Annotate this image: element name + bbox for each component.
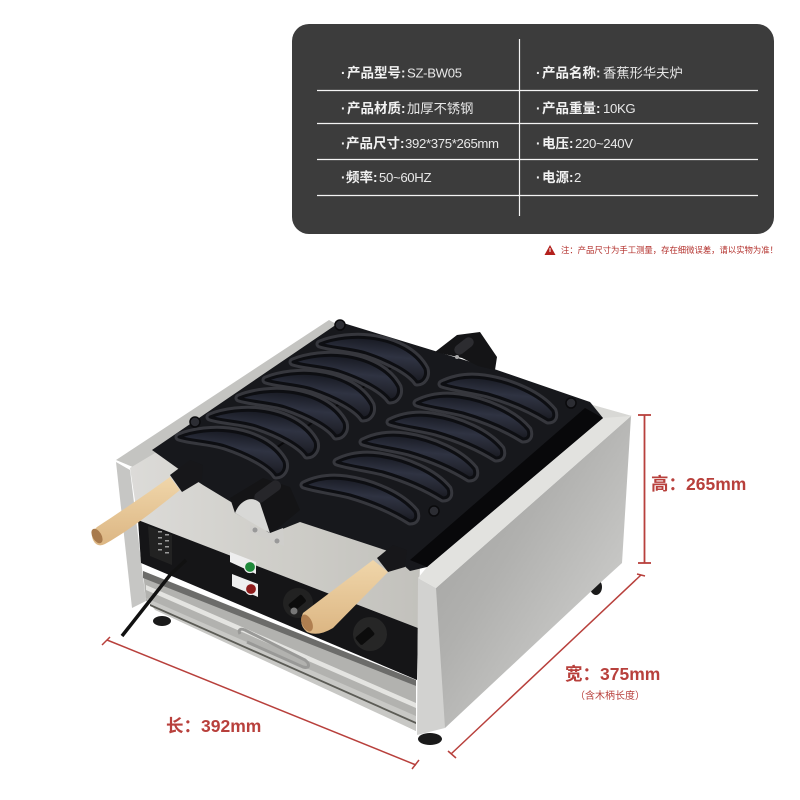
left steel post (116, 462, 146, 608)
spec: frequency: 50~60HZ (379, 170, 431, 185)
left plate mould rims (179, 337, 426, 475)
black waffle plate (152, 320, 603, 571)
left plate moulds (179, 337, 426, 475)
dimension: width: （含木柄长度） (575, 689, 645, 702)
machine feet (153, 579, 602, 745)
icon: warning triangle (544, 245, 556, 255)
spec: weight: · (536, 101, 540, 116)
illustration: banana waffle machine (89, 320, 632, 745)
control panel (138, 520, 418, 680)
spec: size: · (341, 136, 346, 151)
rear steel top edge (116, 320, 340, 470)
right steel side (417, 416, 631, 735)
spec: power: 电源: (542, 170, 574, 185)
spec: size: 产品尺寸: (346, 135, 404, 151)
power indicator (230, 552, 256, 574)
spec: model: · (341, 66, 346, 80)
spec: power: · (536, 170, 540, 185)
spec: voltage: 电压: (542, 136, 574, 151)
drawer (143, 571, 416, 731)
spec: material: · (341, 101, 346, 116)
power cord (122, 560, 186, 636)
drawer handle (239, 629, 309, 667)
rear hinge (435, 332, 497, 370)
spec: weight: 10KG (603, 101, 635, 116)
right plate moulds (304, 377, 554, 521)
spec: name: 香蕉形华夫炉 (603, 66, 683, 80)
note: measurement disclaimer: 注：产品尺寸为手工测量，存在细微误差，请以实物为准！ (561, 245, 778, 255)
dimension: width: 宽：375mm (565, 664, 660, 684)
spec: frequency: 频率: (346, 169, 378, 185)
spec: name: 产品名称: (542, 64, 600, 80)
front hinge and steel bracket (230, 478, 300, 546)
right plate mould rims (304, 377, 554, 521)
spec: material: 加厚不锈钢 (407, 101, 473, 116)
heat indicator (232, 574, 258, 597)
spec: size: 392*375*265mm (405, 136, 499, 151)
spec: model: 产品型号: (347, 64, 406, 80)
spec: voltage: · (536, 136, 540, 151)
spec: frequency: · (341, 170, 346, 185)
front steel panel (130, 450, 420, 628)
spec: material: 产品材质: (347, 100, 406, 116)
dimension: width (448, 574, 660, 758)
left timer knob (283, 588, 313, 618)
spec: power: 2 (574, 170, 581, 185)
dimension: height: 高：265mm (651, 474, 746, 494)
spec: name: · (536, 66, 540, 80)
dimension: length (102, 637, 419, 769)
right wooden handle (299, 545, 407, 634)
spec: voltage: 220~240V (575, 136, 633, 151)
left wooden handle (89, 460, 203, 545)
plate bolts (190, 320, 576, 516)
dimension: length: 长：392mm (166, 716, 261, 736)
panel: specifications table (292, 24, 774, 234)
spec: model: SZ-BW05 (407, 66, 462, 80)
right thermostat knob (353, 617, 387, 651)
spec: weight: 产品重量: (542, 100, 600, 116)
